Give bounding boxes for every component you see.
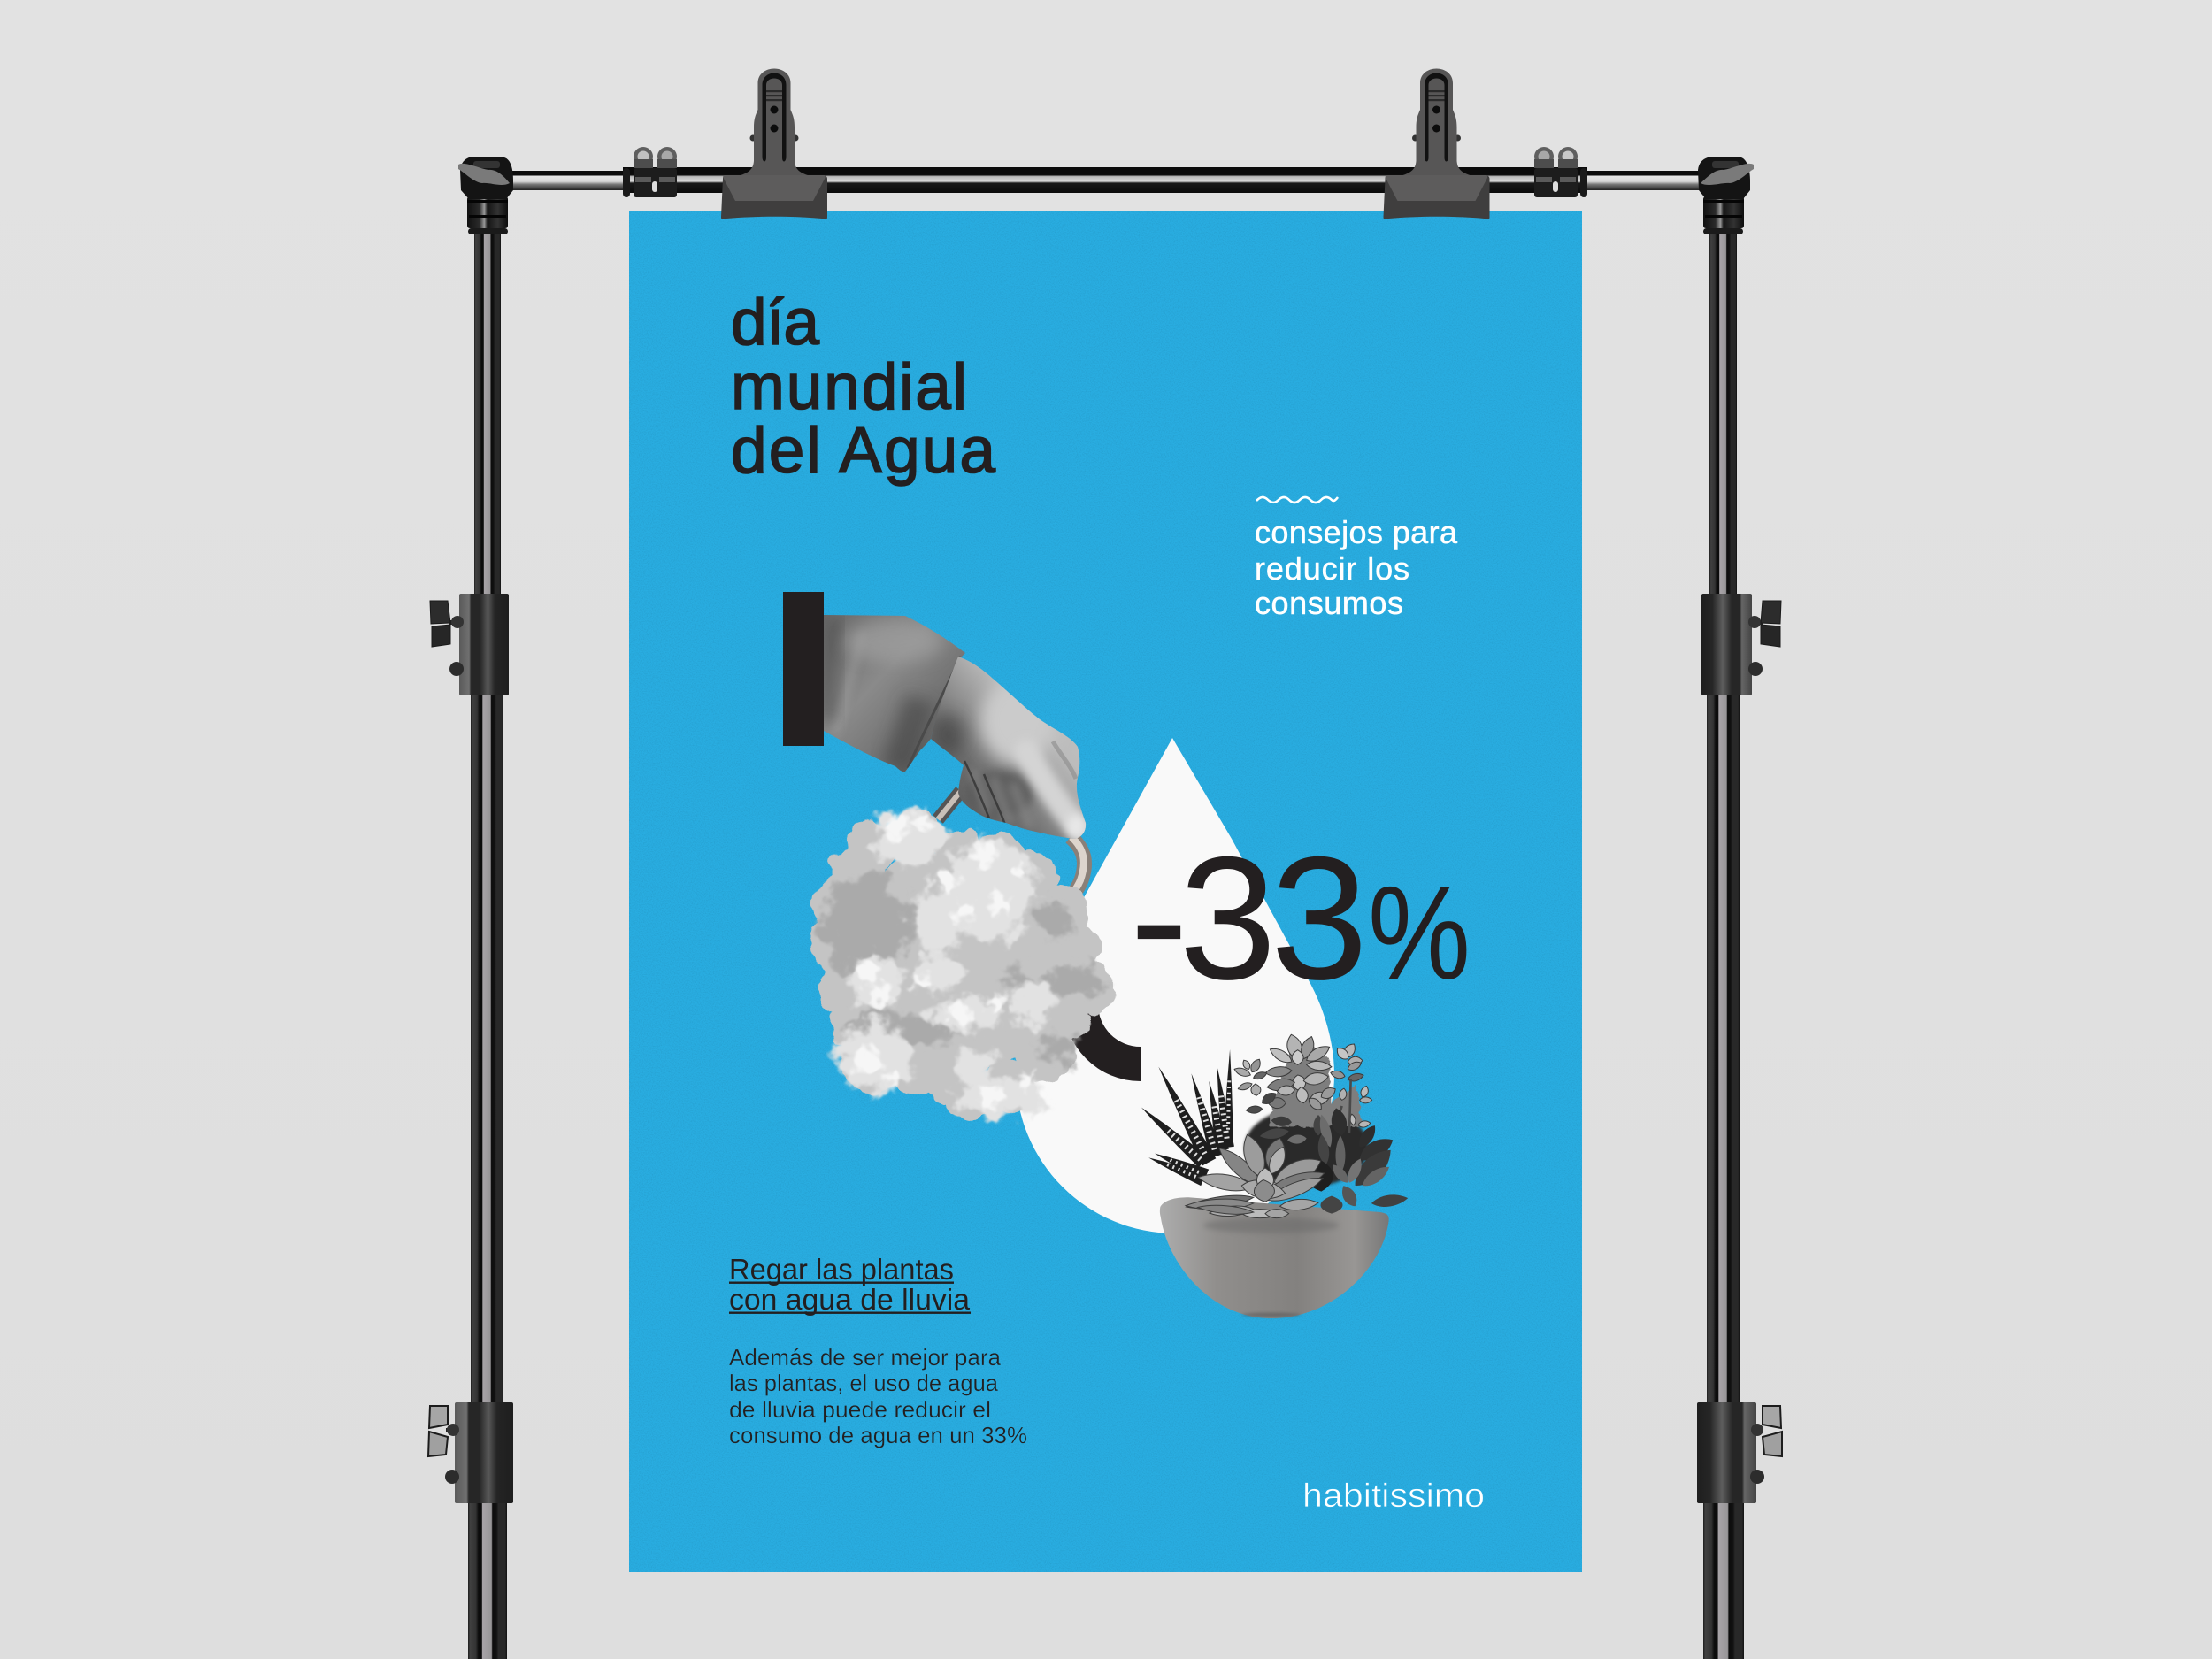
poster panel: [629, 211, 1582, 1572]
subtitle: reducir los: [1255, 550, 1409, 587]
small right sprigs: [1340, 1041, 1358, 1060]
dark foliage behind: [1245, 1108, 1369, 1187]
sleeve: [824, 615, 965, 772]
percent figure: 3: [1179, 820, 1277, 1016]
right rail coupler with screws: [1534, 147, 1587, 197]
hand holding the can: [818, 611, 1093, 845]
cloud bright puffs: [854, 812, 1034, 1110]
title: [731, 287, 995, 487]
stems and mid-grey mass behind the top cluster: [1268, 1047, 1363, 1126]
potted succulents: [1137, 1033, 1409, 1318]
watering can handles: [938, 791, 1085, 910]
rosette succulent: [1186, 1132, 1326, 1218]
black arc of watering can: [1064, 1004, 1141, 1081]
percent figure: %: [1368, 858, 1471, 1007]
title: del Agua: [731, 415, 995, 487]
dark mid leaves: [1259, 1107, 1409, 1214]
subtitle: consumos: [1255, 585, 1403, 621]
left stand pole: [428, 234, 513, 1659]
pale top cluster: [1233, 1033, 1372, 1133]
text: tip body: Además de ser mejor para: [729, 1344, 1002, 1371]
cloud light masses: [839, 812, 1056, 1117]
left rail coupler with screws: [623, 147, 677, 197]
text: tip body: las plantas, el uso de agua: [729, 1370, 999, 1396]
subtitle: [1255, 514, 1458, 621]
logo: habitissimo: habitissimo: [1302, 1478, 1485, 1515]
hand: [931, 657, 1087, 839]
top horizontal rail: [511, 167, 1699, 193]
pot: [1160, 1197, 1389, 1318]
right bulldog clip: [1384, 69, 1490, 219]
text: tip body: de lluvia puede reducir el: [729, 1396, 991, 1423]
text: tip heading: [729, 1253, 971, 1316]
subtitle: consejos para: [1255, 514, 1458, 550]
zebra succulent: [1137, 1049, 1234, 1186]
small left rosette: [1248, 1057, 1263, 1074]
percent figure: -: [1130, 820, 1188, 1016]
right corner joint: [1698, 157, 1754, 234]
title: mundial: [731, 351, 967, 423]
left corner joint: [458, 157, 513, 234]
percent figure: 3: [1271, 820, 1368, 1016]
cloud: [810, 810, 1113, 1120]
text: tip heading: Regar las plantas: [729, 1253, 954, 1286]
right stand pole: [1697, 234, 1782, 1659]
text: tip body: [729, 1344, 1027, 1448]
cloud darker masses: [823, 873, 1105, 1063]
left bulldog clip: [721, 69, 827, 219]
icon: wave line: [1256, 497, 1338, 503]
text: tip heading: con agua de lluvia: [729, 1283, 971, 1316]
white water drop: [1016, 738, 1334, 1233]
black rectangle spout: [783, 592, 824, 746]
cloud silhouette: [810, 810, 1113, 1120]
title: día: [731, 287, 819, 358]
text: tip body: consumo de agua en un 33%: [729, 1422, 1027, 1448]
